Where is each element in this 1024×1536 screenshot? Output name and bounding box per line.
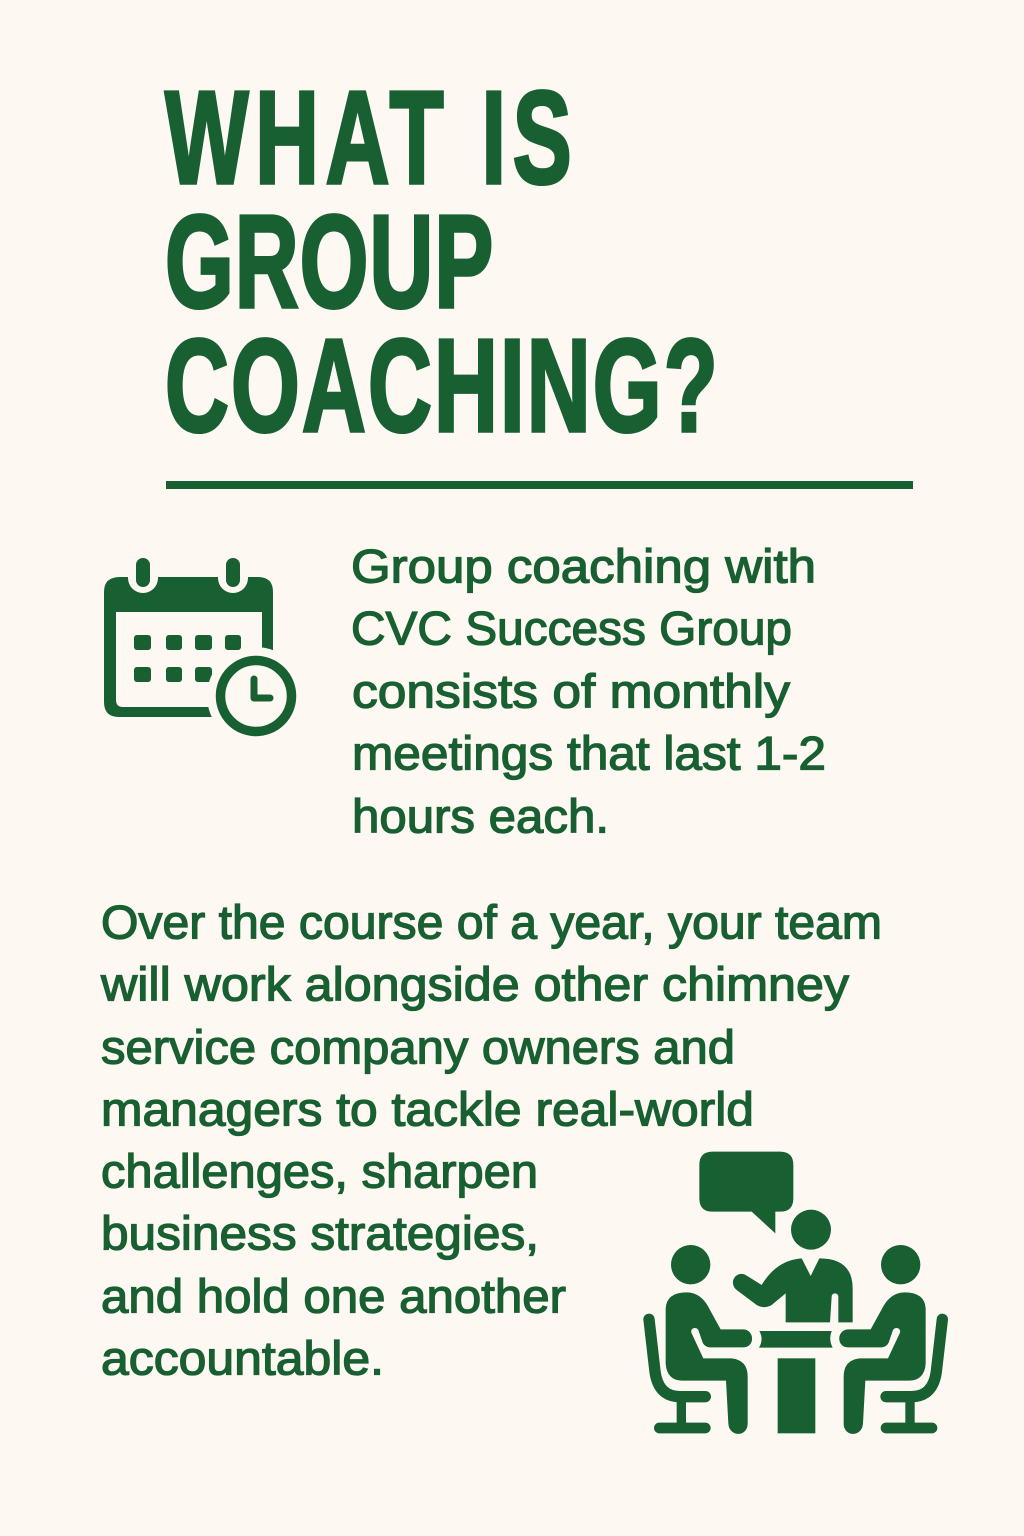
text block: monthly meetings: CVC Success Group bbox=[351, 602, 792, 656]
text block: monthly meetings bbox=[351, 540, 826, 844]
title bbox=[165, 63, 718, 459]
text block: monthly meetings: meetings that last 1-2 bbox=[352, 728, 826, 780]
text block: monthly meetings: Group coaching with bbox=[351, 540, 816, 594]
text block: year of group work: accountable. bbox=[101, 1332, 384, 1386]
text block: year of group work: and hold one another bbox=[101, 1270, 566, 1324]
text block: year of group work: managers to tackle real-world bbox=[101, 1084, 754, 1136]
right person bbox=[839, 1245, 942, 1434]
text block: year of group work: business strategies, bbox=[101, 1208, 539, 1260]
text block: monthly meetings: hours each. bbox=[352, 790, 609, 844]
presenter bbox=[733, 1210, 853, 1322]
title: WHAT IS bbox=[165, 63, 572, 211]
speech bubble bbox=[699, 1152, 793, 1233]
title: GROUP bbox=[165, 187, 493, 335]
table bbox=[759, 1331, 833, 1433]
text block: year of group work bbox=[100, 896, 882, 1386]
title divider bbox=[166, 481, 913, 489]
text block: monthly meetings: consists of monthly bbox=[352, 666, 790, 718]
title: COACHING? bbox=[165, 311, 718, 459]
left person bbox=[649, 1245, 752, 1434]
icon: calendar with clock bbox=[104, 545, 305, 745]
text block: year of group work: will work alongside other chimney bbox=[100, 958, 849, 1012]
text block: year of group work: Over the course of a year, your team bbox=[101, 896, 882, 950]
text block: year of group work: service company owners and bbox=[101, 1022, 735, 1074]
icon: group meeting around a table bbox=[649, 1152, 942, 1434]
text block: year of group work: challenges, sharpen bbox=[101, 1146, 538, 1198]
